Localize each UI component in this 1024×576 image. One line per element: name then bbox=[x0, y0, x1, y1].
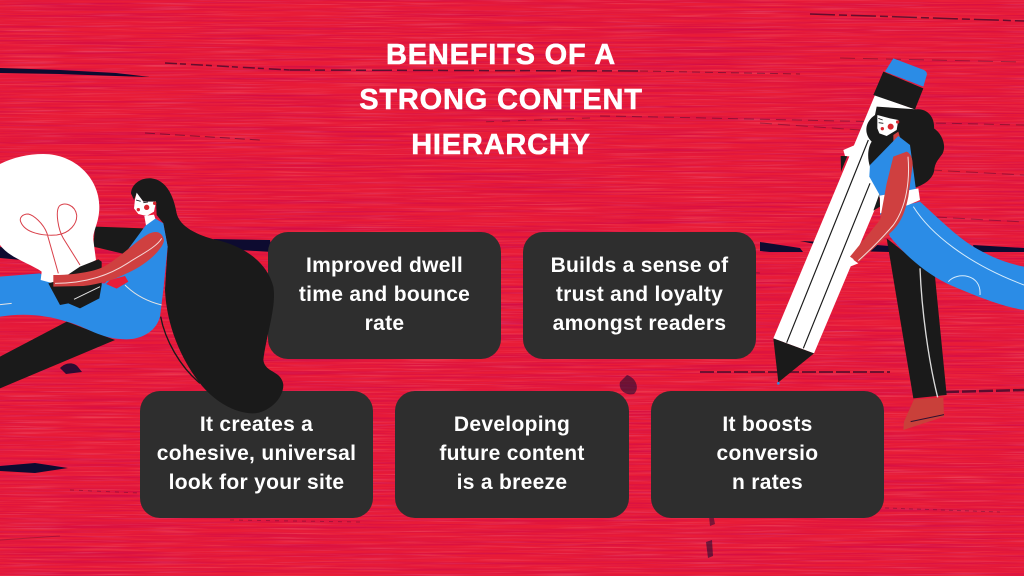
lower arm behind pencil bbox=[873, 194, 880, 211]
pencil lines bbox=[787, 140, 870, 348]
card: cohesive look: look for your site bbox=[169, 471, 344, 494]
card: future content: is a breeze bbox=[457, 471, 567, 494]
card: conversion rates bbox=[651, 391, 884, 518]
card: cohesive look: cohesive, universal bbox=[157, 442, 356, 465]
card: trust and loyalty: amongst readers bbox=[553, 312, 726, 335]
title bbox=[359, 39, 643, 161]
card: cohesive look: It creates a bbox=[200, 413, 313, 436]
body seams bbox=[0, 285, 162, 305]
eyes bbox=[136, 200, 148, 203]
thin hair strand bbox=[161, 317, 200, 383]
card: future content: future content bbox=[439, 442, 585, 465]
card: conversion rates: It boosts bbox=[722, 413, 813, 436]
pencil ferrule bbox=[873, 72, 923, 109]
card: trust and loyalty: Builds a sense of bbox=[551, 254, 728, 277]
leg bbox=[0, 322, 115, 388]
card: cohesive look bbox=[140, 391, 373, 518]
card: trust and loyalty: trust and loyalty bbox=[556, 283, 723, 306]
hand and bulb base bbox=[48, 259, 102, 308]
pencil hand bbox=[850, 257, 858, 267]
hair bbox=[866, 107, 944, 187]
card: dwell time bbox=[268, 232, 501, 359]
card: future content bbox=[395, 391, 629, 518]
pencil eraser bbox=[885, 58, 927, 87]
bulb bbox=[0, 154, 99, 283]
hair bbox=[131, 178, 283, 413]
card: conversion rates: conversio bbox=[717, 442, 818, 465]
red hand bbox=[106, 276, 128, 289]
eyes bbox=[878, 118, 883, 123]
title: BENEFITS OF A bbox=[386, 39, 616, 71]
back hand bbox=[841, 156, 847, 172]
far arm bbox=[93, 227, 143, 255]
skirt bbox=[880, 202, 1024, 310]
neck bbox=[144, 215, 155, 225]
neck bbox=[893, 132, 900, 145]
pencil tip bbox=[773, 338, 814, 382]
shoe bbox=[903, 397, 944, 430]
pencil body bbox=[773, 95, 917, 353]
white waist bbox=[880, 188, 920, 213]
cheek, lips and ear bbox=[881, 120, 899, 130]
card: dwell time: Improved dwell bbox=[306, 254, 463, 277]
face bbox=[134, 193, 156, 216]
title: STRONG CONTENT bbox=[359, 84, 643, 116]
blue top bbox=[869, 136, 916, 196]
card: trust and loyalty bbox=[523, 232, 756, 359]
card: conversion rates: n rates bbox=[732, 471, 803, 494]
sleeve bbox=[53, 232, 164, 287]
card: dwell time: rate bbox=[365, 312, 404, 335]
blue body bbox=[0, 218, 168, 339]
cheek, lips and ear bbox=[137, 202, 156, 211]
trouser seam bbox=[920, 268, 938, 397]
sleeve seam bbox=[55, 238, 162, 283]
trouser leg bbox=[887, 238, 947, 398]
card: future content: Developing bbox=[454, 413, 570, 436]
card: dwell time: time and bounce bbox=[299, 283, 470, 306]
face bbox=[877, 115, 898, 136]
skirt seam and pocket bbox=[913, 207, 1024, 295]
sleeve bbox=[850, 152, 913, 263]
filament bbox=[20, 204, 80, 273]
title: HIERARCHY bbox=[411, 129, 591, 161]
